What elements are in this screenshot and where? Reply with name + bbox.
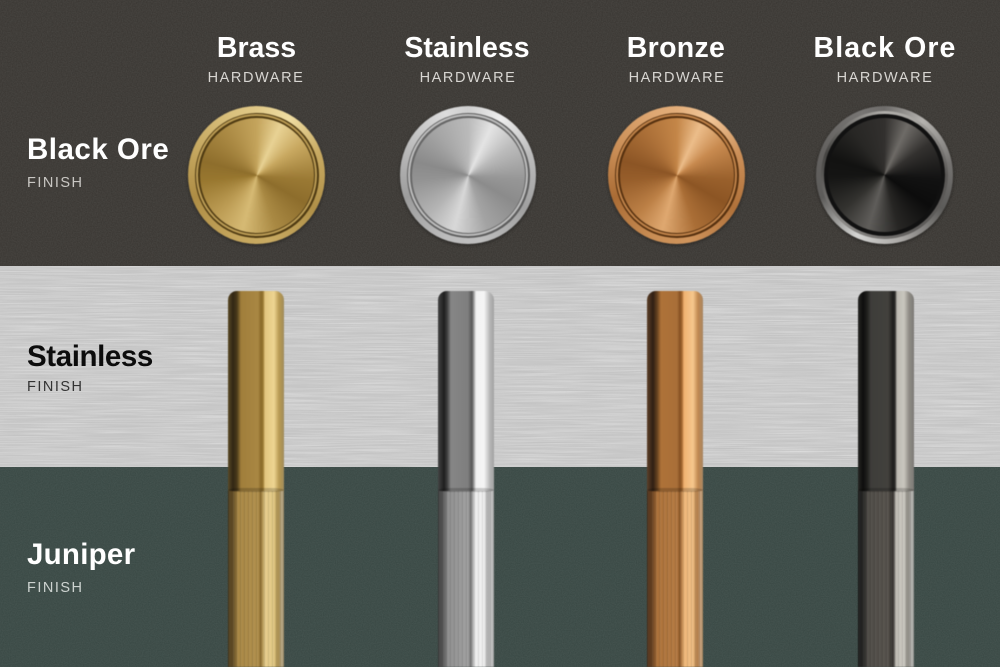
column heading: Black Ore hardware xyxy=(814,32,956,86)
row label: Black Ore finish: Black Ore xyxy=(27,133,169,166)
column heading: Stainless hardware: HARDWARE xyxy=(420,70,516,86)
column heading: Bronze hardware xyxy=(627,32,725,86)
row label: Black Ore finish xyxy=(27,133,169,191)
column heading: Black Ore hardware: HARDWARE xyxy=(837,70,933,86)
row label: Juniper finish: FINISH xyxy=(27,580,84,596)
row label: Black Ore finish: FINISH xyxy=(27,175,84,191)
column heading: Brass hardware: Brass xyxy=(217,32,296,64)
panel: black ore finish band xyxy=(0,0,1000,266)
row label: Juniper finish xyxy=(27,538,135,596)
icon: bronze knob swatch xyxy=(608,106,745,244)
column heading: Black Ore hardware: Black Ore xyxy=(814,32,956,64)
icon: brass knob swatch xyxy=(188,106,325,244)
row label: Stainless finish: FINISH xyxy=(27,379,84,395)
icon: stainless pull handle xyxy=(437,290,495,667)
column heading: Brass hardware: HARDWARE xyxy=(208,70,304,86)
row label: Stainless finish xyxy=(27,340,153,395)
panel: juniper finish band xyxy=(0,467,1000,667)
icon: black ore knob swatch xyxy=(816,106,953,244)
icon: black ore pull handle xyxy=(857,290,914,667)
column heading: Brass hardware xyxy=(208,32,304,86)
column heading: Bronze hardware: Bronze xyxy=(627,32,725,64)
icon: stainless knob swatch xyxy=(400,106,536,244)
row label: Juniper finish: Juniper xyxy=(27,538,135,571)
row label: Stainless finish: Stainless xyxy=(27,340,153,373)
column heading: Stainless hardware xyxy=(404,32,530,86)
icon: bronze pull handle xyxy=(646,290,704,667)
panel: stainless finish band xyxy=(0,266,1000,467)
column heading: Bronze hardware: HARDWARE xyxy=(629,70,725,86)
icon: brass pull handle xyxy=(227,290,285,667)
column heading: Stainless hardware: Stainless xyxy=(404,32,530,64)
